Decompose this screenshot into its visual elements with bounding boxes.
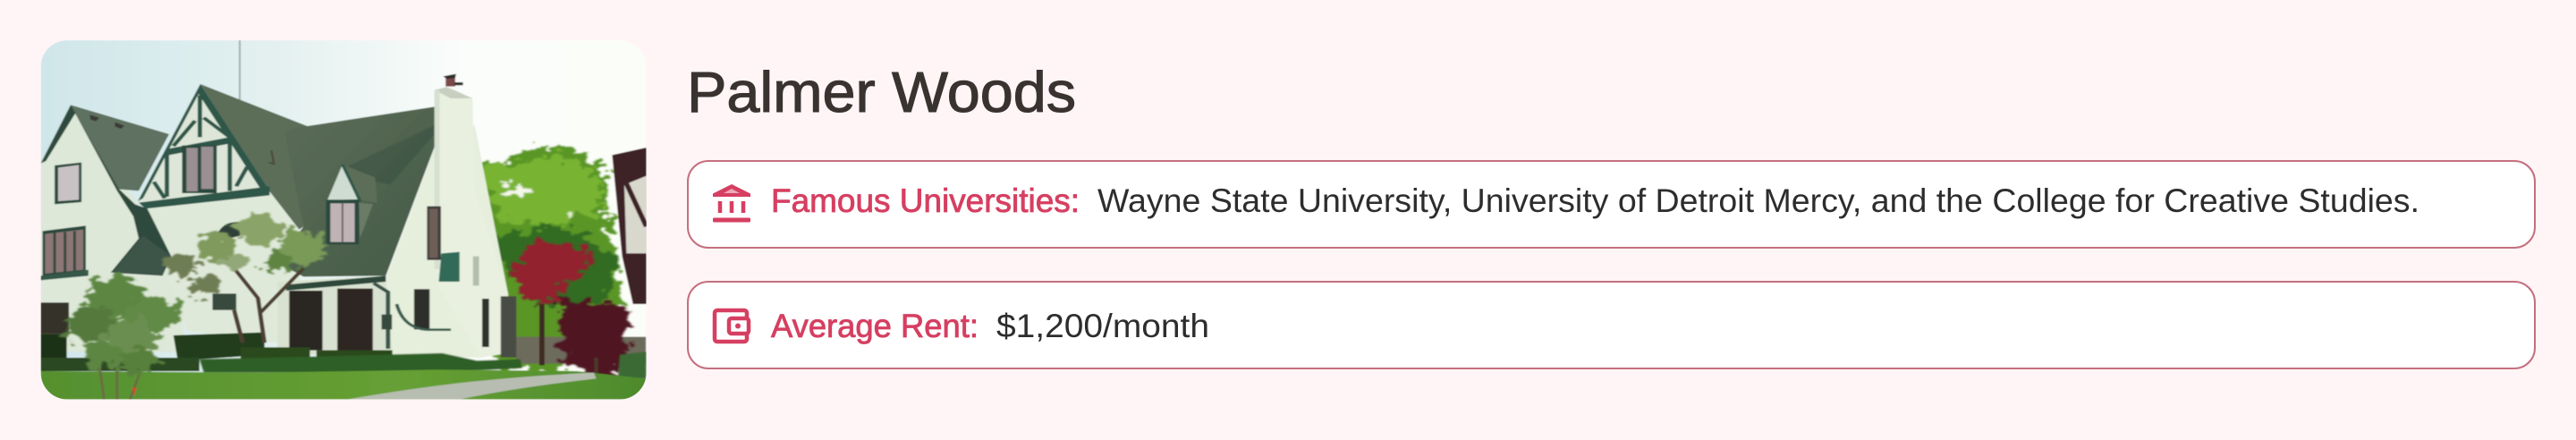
neighbouring house [612,148,647,304]
shrubs [41,334,67,367]
dormer [346,166,377,202]
driveway [347,373,596,400]
main roof [277,106,442,276]
left lower window [43,225,86,277]
stucco shadow band [111,203,171,273]
small tree left [98,366,141,399]
front porch [277,275,393,355]
panel: famous universities [687,160,2536,249]
small tree centre [234,268,303,343]
wall windows [427,207,441,260]
text: average rent [771,308,1209,344]
icon: university building [713,184,750,222]
centre roof right slope [200,84,309,230]
text: famous universities: Wayne State University, University of Detroit Mercy, and the College for Creative Studies. [1097,182,2419,219]
left house wall [41,105,186,351]
panel: average rent [687,281,2536,369]
centre gable wall [148,190,303,346]
icon: wallet [712,308,751,343]
lawn [41,369,647,400]
photo: Tudor-style house in Palmer Woods [41,40,647,400]
left roof [71,105,169,190]
title: Palmer Woods [687,60,1076,124]
red maple [512,241,629,382]
text: average rent: $1,200/month [996,308,1209,344]
background trees [466,146,624,373]
arched window [218,222,242,238]
right gable wall [386,125,508,358]
fence [516,337,646,364]
left upper window [55,163,81,204]
text: famous universities: Famous Universities: [771,182,1080,219]
chimney [438,88,502,356]
text: average rent: Average Rent: [771,308,979,344]
half-timber gable [138,95,267,203]
